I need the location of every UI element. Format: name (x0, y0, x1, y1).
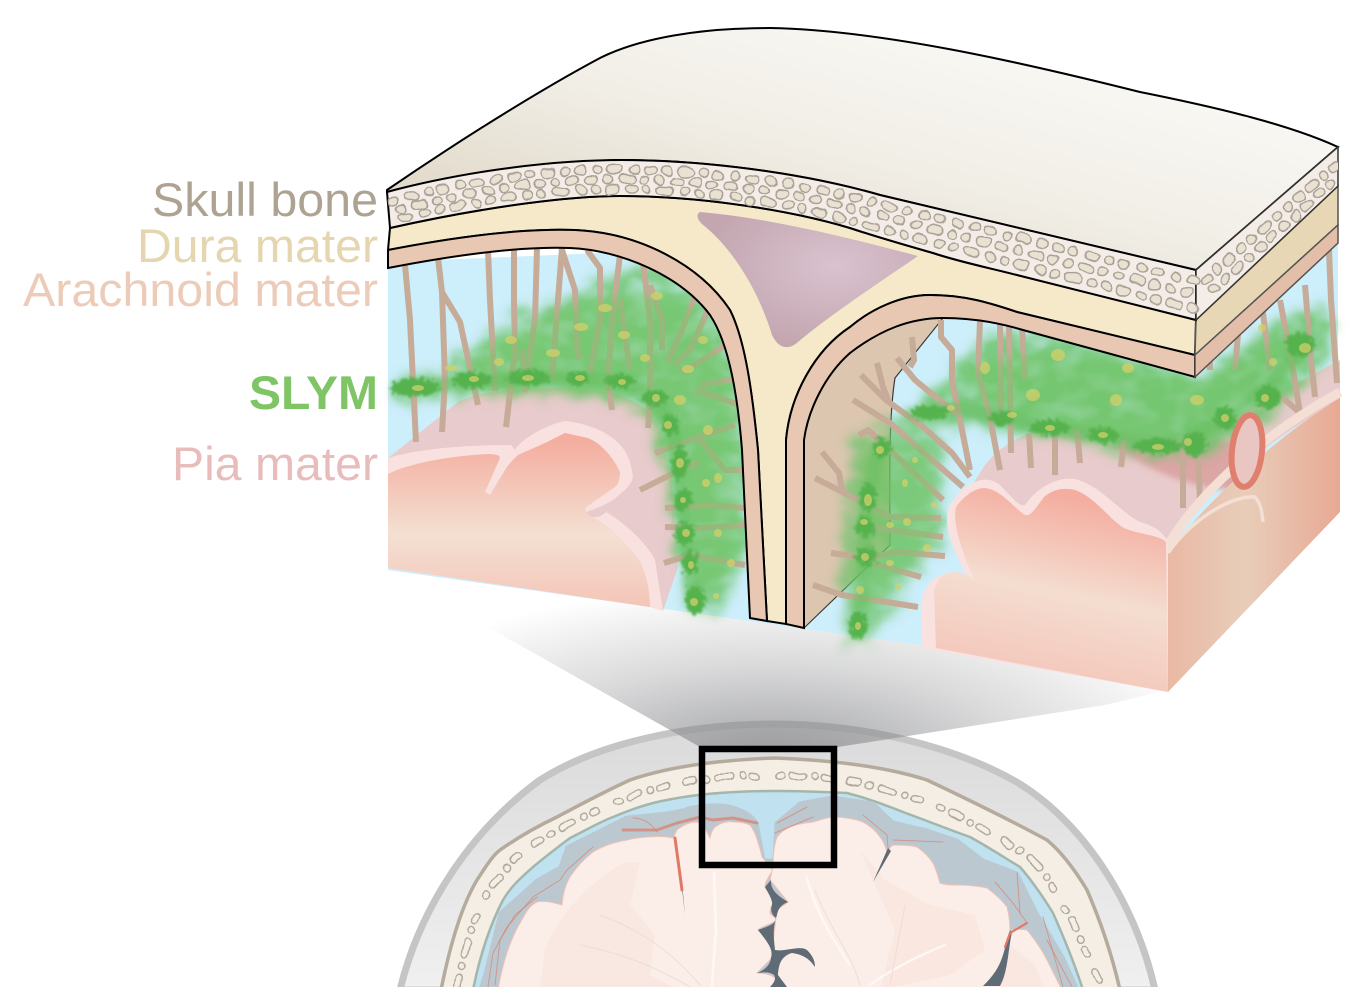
brain tissue (498, 817, 1062, 987)
blood vessel (1228, 414, 1266, 488)
gyrus ridge on side face (1168, 497, 1263, 553)
pia outline right (922, 479, 1168, 692)
SLYM translucent overlay (470, 295, 1310, 620)
SLYM yellow nuclei (412, 292, 1311, 630)
cortical shading (540, 850, 1045, 987)
SLYM dense band (392, 340, 1310, 630)
meningeal vessels (488, 807, 1072, 987)
brain block left (388, 421, 663, 611)
skull block (387, 28, 1338, 628)
cortex left (388, 433, 650, 607)
label: SLYM: SLYM (249, 366, 378, 419)
brain block right (922, 392, 1340, 692)
label: Dura mater: Dura mater (137, 219, 378, 272)
skull outer dome (400, 724, 1155, 987)
pia surface band right (1166, 392, 1340, 548)
zoom box (702, 749, 834, 865)
magnification funnel (388, 570, 1168, 747)
dura mater (388, 196, 1196, 624)
side face (1168, 398, 1340, 692)
diploe side face (1196, 147, 1338, 320)
dura side face (1195, 186, 1338, 355)
skull top surface (387, 28, 1338, 270)
midline fissure (757, 880, 815, 987)
white matter fibres (580, 890, 905, 987)
CSF space background (388, 222, 1338, 680)
label: Skull bone: Skull bone (152, 173, 378, 226)
arachnoid veil (480, 797, 1078, 987)
pia surface left (388, 388, 678, 611)
bone pores (458, 775, 1102, 985)
lower illustration: skull cross-section (400, 724, 1155, 987)
skull bone band (441, 758, 1120, 987)
arachnoid left (388, 230, 767, 621)
bone pores (392, 166, 1335, 309)
arachnoid side face (1195, 225, 1338, 377)
label: Arachnoid mater: Arachnoid mater (23, 263, 378, 316)
arachnoid right (786, 295, 1195, 628)
fold trabeculae (813, 337, 970, 607)
pia outline left (388, 421, 663, 611)
label: Pia mater: Pia mater (172, 437, 378, 490)
diploe band (387, 160, 1196, 320)
white matter streaks (712, 872, 945, 985)
SLYM dense cell clusters (391, 332, 1314, 639)
brain right hemisphere (770, 817, 1062, 987)
back wall of falx fold (804, 318, 943, 628)
cortex right (934, 488, 1168, 692)
brain left hemisphere (498, 822, 780, 987)
left trabeculae (405, 248, 745, 565)
pia surface right (950, 360, 1340, 553)
SLYM light membrane (392, 265, 1331, 648)
subarachnoid space (473, 791, 1083, 987)
sulci (681, 848, 1012, 986)
superior sagittal sinus (698, 212, 918, 347)
arachnoid trabeculae (405, 248, 1337, 607)
right trabeculae (941, 250, 1337, 508)
